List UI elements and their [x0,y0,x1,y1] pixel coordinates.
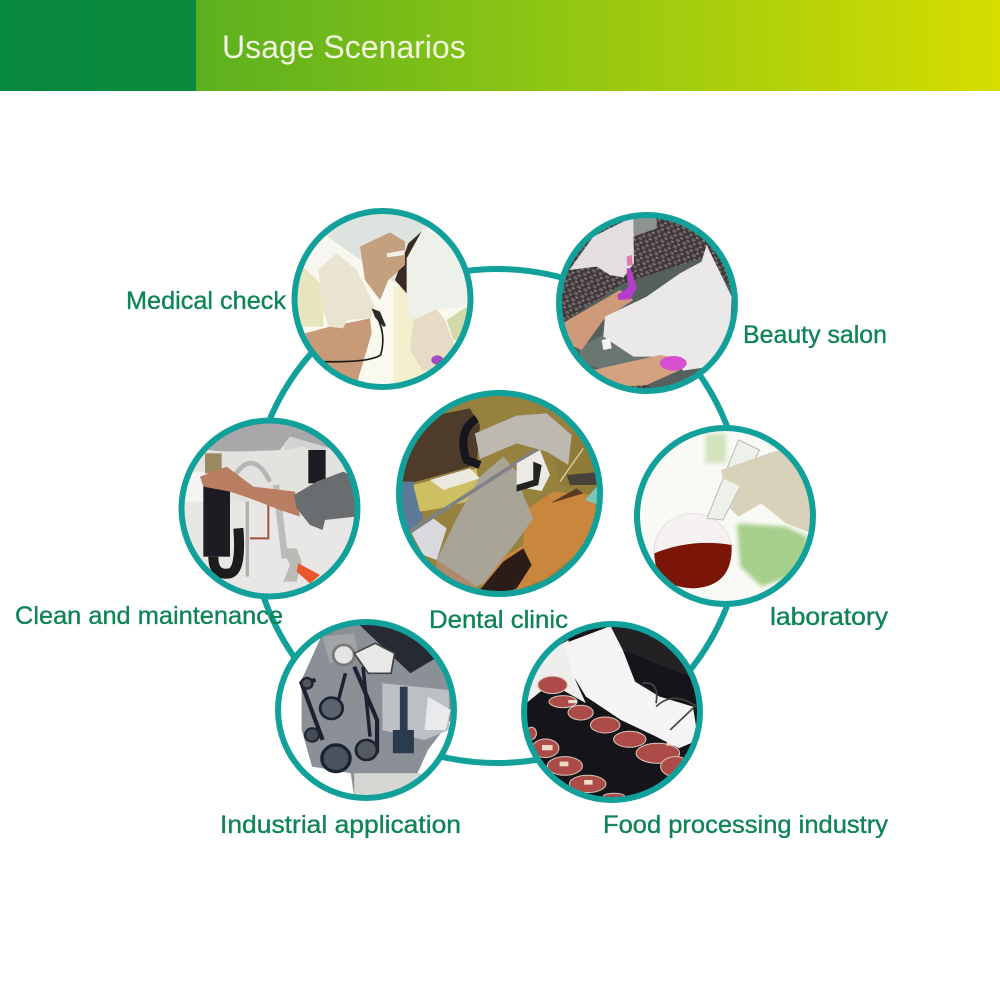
header dark green block [0,0,196,91]
photo circle: medical check [298,214,468,384]
photo circle: laboratory [640,431,810,601]
photo circle: beauty salon [562,218,732,388]
photo circle: clean and maintenance [184,424,354,594]
title: Usage Scenarios [222,29,466,65]
photo circle: food processing [527,627,697,797]
photo circle: industrial application [295,625,451,795]
label: laboratory: laboratory [770,603,889,631]
label: clean and maintenance: Clean and maintenance [15,602,283,630]
header banner [0,0,1000,91]
label: industrial application: Industrial application [220,811,461,839]
label: medical check: Medical check [126,287,286,315]
label: dental clinic: Dental clinic [429,606,568,634]
label: food processing industry: Food processing industry [603,811,889,839]
scenario diagram [16,208,888,838]
photo circle: dental clinic [402,396,597,591]
label: beauty salon: Beauty salon [743,321,887,349]
